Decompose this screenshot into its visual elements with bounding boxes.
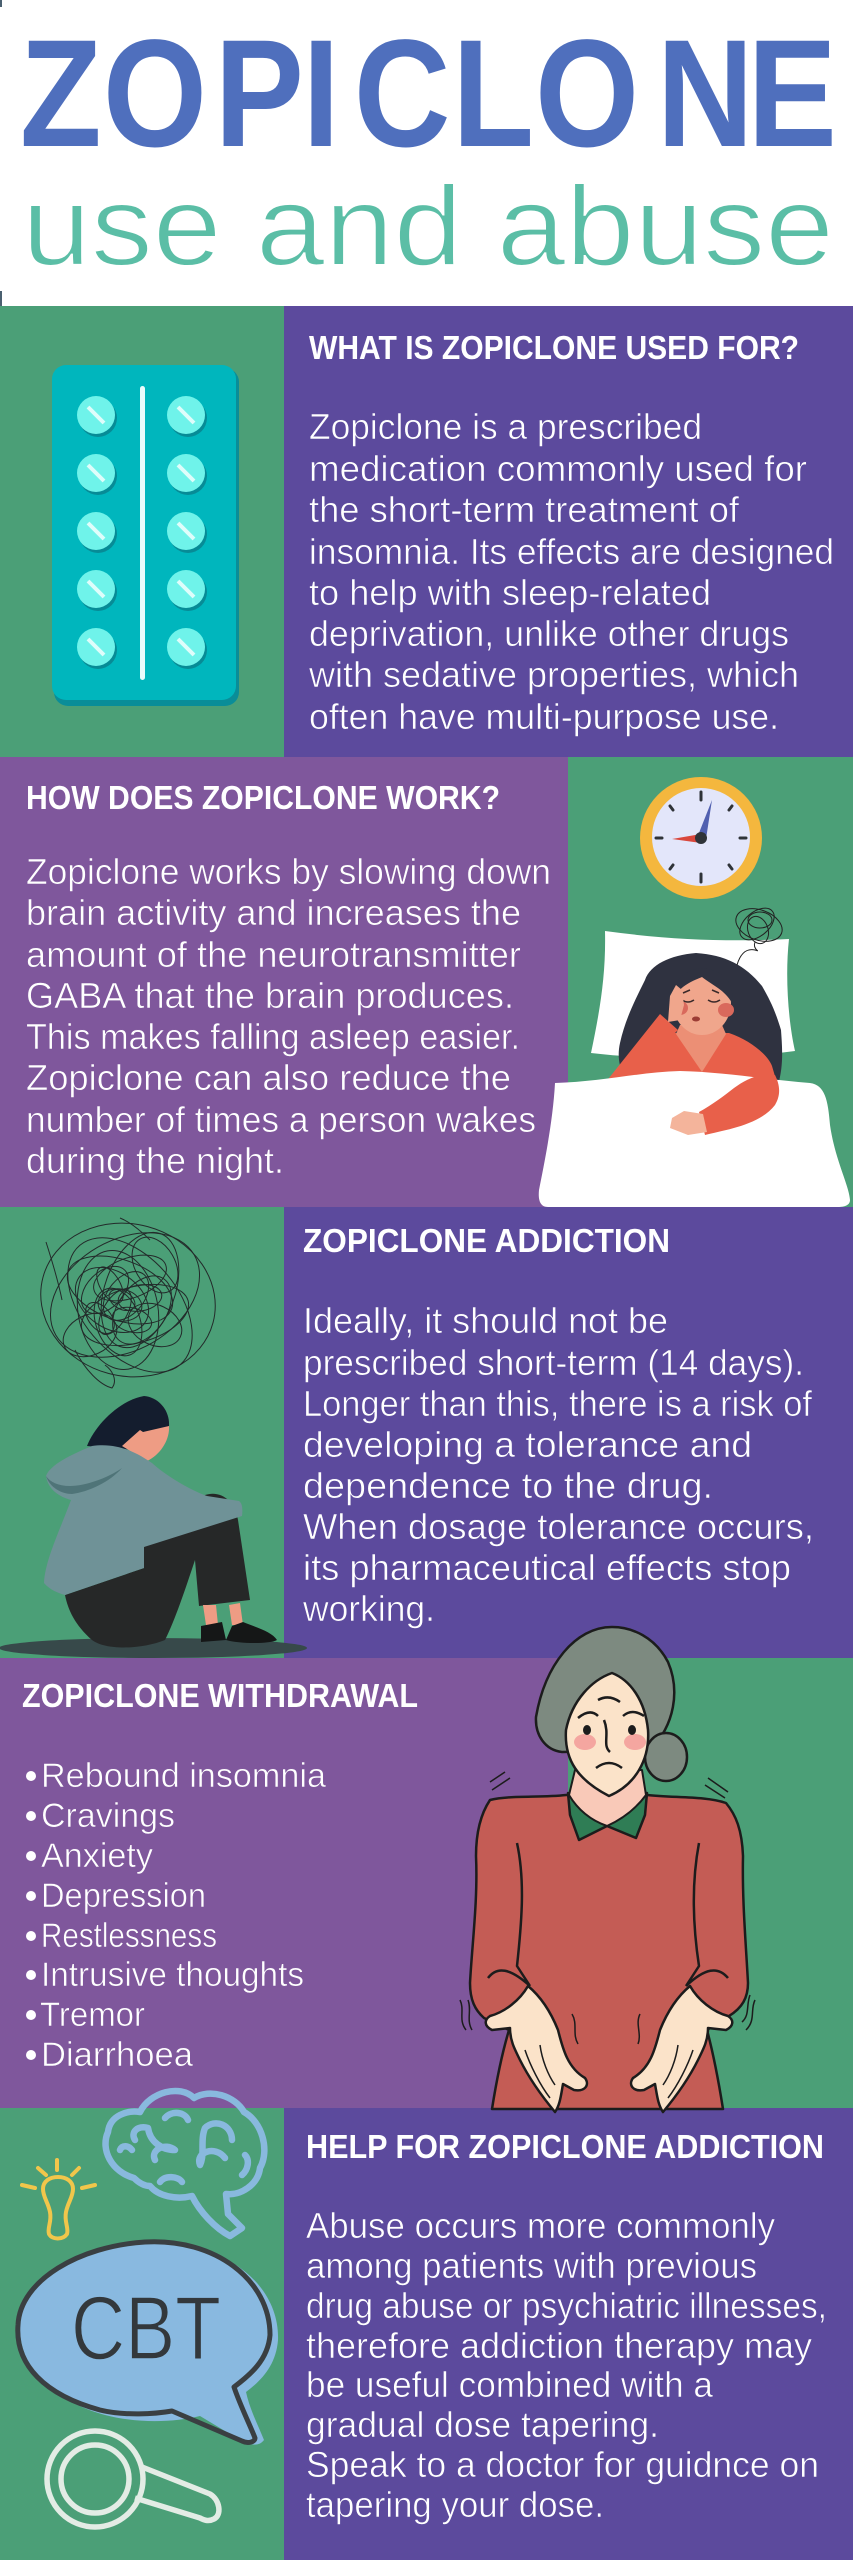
- body text: [26, 851, 551, 1181]
- hair: [619, 953, 782, 1085]
- body text: often have multi-purpose use.: [309, 696, 779, 737]
- blanket: [539, 1071, 850, 1207]
- neck: [569, 1770, 646, 1826]
- body text: gradual dose tapering.: [306, 2404, 659, 2445]
- left hand: [486, 1986, 587, 2112]
- icon: blister pack of pills: [52, 365, 239, 706]
- edge marks: [0, 0, 2, 306]
- hair: [87, 1396, 169, 1450]
- illustration: tangled thought scribble: [23, 1204, 233, 1396]
- body text: Speak to a doctor for guidnce on: [306, 2444, 819, 2485]
- icon: light bulb: [22, 2160, 95, 2238]
- body text: Zopiclone can also reduce the: [26, 1057, 511, 1098]
- icon: brain outline: [106, 2091, 264, 2236]
- heading: ZOPICLONE WITHDRAWAL: [22, 1677, 418, 1714]
- body text: Ideally, it should not be: [303, 1300, 668, 1341]
- sweater: [470, 1795, 748, 2109]
- body text: [306, 2205, 827, 2525]
- title: ZOPICLONE: [20, 9, 837, 179]
- body text: This makes falling asleep easier.: [26, 1016, 520, 1057]
- face and neck: [676, 1025, 726, 1072]
- illustration: woman lying awake in bed: [539, 902, 850, 1207]
- right hand: [631, 1986, 732, 2112]
- body text: Zopiclone is a prescribed: [309, 406, 702, 447]
- symptom list: Depression: [41, 1877, 206, 1915]
- pillow: [591, 931, 795, 1058]
- illustration: older woman with trembling hands: [460, 1627, 755, 2112]
- body text: therefore addiction therapy may: [306, 2325, 812, 2366]
- heading: ZOPICLONE ADDICTION: [303, 1222, 670, 1259]
- symptom list: Rebound insomnia: [41, 1757, 326, 1795]
- panel: zopiclone addiction: [0, 1204, 853, 1658]
- symptom list: Restlessness: [41, 1917, 217, 1955]
- body text: the short-term treatment of: [309, 489, 740, 530]
- ankles: [203, 1603, 243, 1625]
- body text: tapering your dose.: [306, 2484, 604, 2525]
- body text: its pharmaceutical effects stop: [303, 1547, 791, 1588]
- pants: [65, 1494, 250, 1648]
- panel: how does zopiclone work: [0, 757, 853, 1207]
- body text: number of times a person wakes: [26, 1099, 536, 1140]
- body text: medication commonly used for: [309, 448, 807, 489]
- face: [122, 1426, 169, 1461]
- panel: zopiclone addiction help: [0, 2091, 853, 2560]
- body text: deprivation, unlike other drugs: [309, 613, 789, 654]
- title: use and abuse: [22, 163, 834, 289]
- body text: Zopiclone works by slowing down: [26, 851, 551, 892]
- body text: When dosage tolerance occurs,: [303, 1506, 814, 1547]
- body text: during the night.: [26, 1140, 284, 1181]
- body text: developing a tolerance and: [303, 1424, 752, 1465]
- shirt: [601, 1014, 779, 1100]
- symptom list: Anxiety: [41, 1837, 153, 1875]
- icon: wall clock: [640, 777, 762, 899]
- body text: be useful combined with a: [306, 2364, 714, 2405]
- hoodie: [44, 1445, 242, 1595]
- floor shadow: [0, 1638, 307, 1658]
- symptom list: Cravings: [41, 1797, 175, 1835]
- symptom list: Intrusive thoughts: [41, 1956, 304, 1994]
- arm over blanket: [699, 1074, 779, 1135]
- CBT label: CBT: [71, 2279, 221, 2379]
- body text: working.: [302, 1588, 435, 1629]
- body text: Abuse occurs more commonly: [306, 2205, 775, 2246]
- body text: Longer than this, there is a risk of: [303, 1383, 813, 1424]
- body text: to help with sleep-related: [309, 572, 711, 613]
- body text: insomnia. Its effects are designed: [309, 531, 834, 572]
- symptom list: Tremor: [40, 1996, 145, 2034]
- body text: drug abuse or psychiatric illnesses,: [306, 2285, 827, 2326]
- body text: prescribed short-term (14 days).: [303, 1342, 804, 1383]
- hand at head: [668, 985, 684, 1022]
- body text: among patients with previous: [306, 2245, 757, 2286]
- body text: with sedative properties, which: [308, 654, 799, 695]
- shoes: [201, 1622, 277, 1643]
- body text: GABA that the brain produces.: [26, 975, 514, 1016]
- icon: magnifying glass: [47, 2431, 219, 2527]
- body text: dependence to the drug.: [303, 1465, 713, 1506]
- panel: what is zopiclone used for: [0, 306, 853, 757]
- title: [0, 0, 853, 306]
- body text: [308, 406, 834, 737]
- heading: HOW DOES ZOPICLONE WORK?: [26, 779, 500, 816]
- illustration: person sitting hugging knees: [0, 1396, 307, 1658]
- panel: zopiclone withdrawal: [0, 1627, 853, 2112]
- body text: brain activity and increases the: [26, 892, 521, 933]
- face: [566, 1673, 648, 1796]
- symptom list: [26, 1757, 326, 2074]
- heading: WHAT IS ZOPICLONE USED FOR?: [309, 329, 799, 366]
- scribble above head: [731, 902, 787, 965]
- body text: amount of the neurotransmitter: [26, 934, 521, 975]
- hair: [536, 1627, 674, 1752]
- heading: HELP FOR ZOPICLONE ADDICTION: [306, 2128, 824, 2165]
- speech bubble: CBT: [18, 2242, 278, 2445]
- finger and tremor marks: [460, 1772, 755, 2098]
- symptom list: Diarrhoea: [41, 2036, 193, 2074]
- collar: [568, 1793, 647, 1840]
- body text: [302, 1300, 814, 1629]
